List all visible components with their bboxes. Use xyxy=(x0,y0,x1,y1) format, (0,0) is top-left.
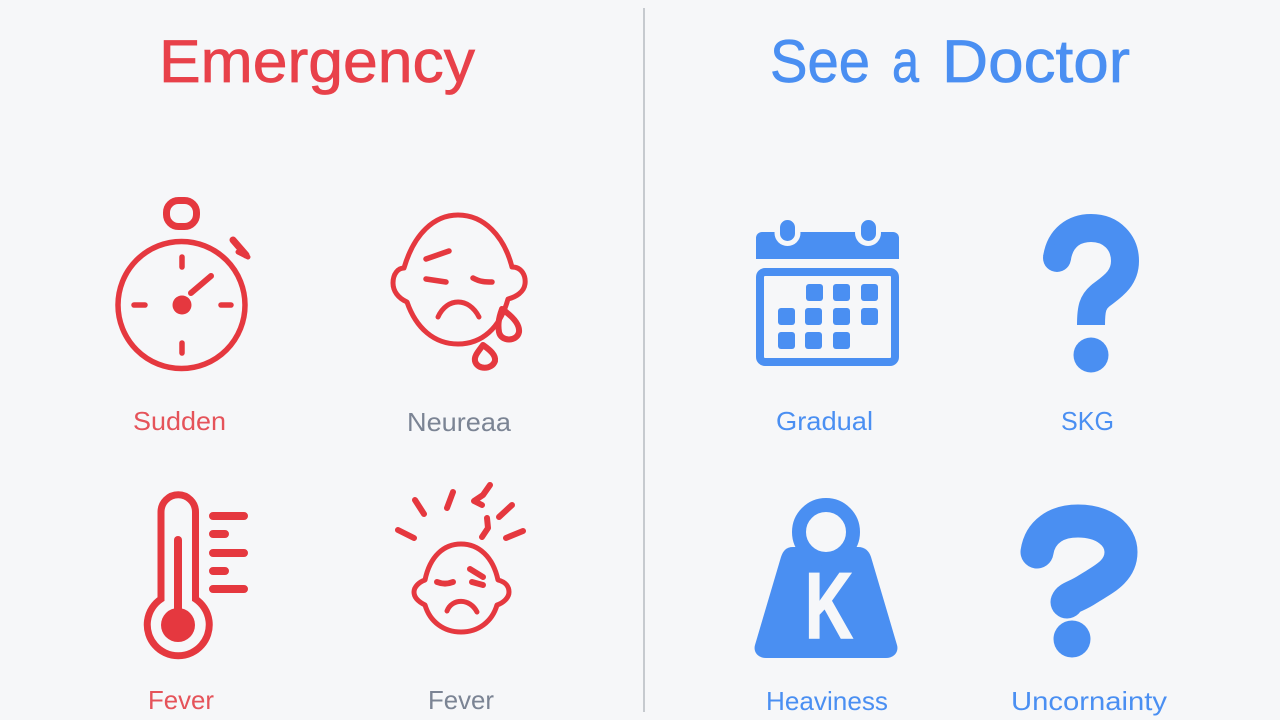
label: Sudden: Sudden xyxy=(133,406,226,436)
icon: kettlebell weight xyxy=(755,505,897,658)
title: See a Doctor: Doctor xyxy=(942,28,1130,95)
title: See a Doctor: See xyxy=(770,28,870,95)
title: See a Doctor: a xyxy=(892,28,920,95)
label: Gradual: Gradual xyxy=(776,406,873,436)
icon: thermometer xyxy=(147,495,244,656)
icon: kettlebell weight: K xyxy=(805,553,853,658)
icon: calendar xyxy=(756,220,899,362)
icon: stopwatch xyxy=(118,200,248,368)
label: Fever gray: Fever xyxy=(428,685,494,715)
icon: nauseous face xyxy=(393,215,525,368)
title: Emergency: Emergency xyxy=(159,28,475,95)
icon: question mark xyxy=(1043,228,1125,372)
label: Uncornainty: Uncornainty xyxy=(1011,686,1167,716)
label: SKG: SKG xyxy=(1061,406,1114,436)
label: Fever: Fever xyxy=(148,685,214,715)
label: Neureaa: Neureaa xyxy=(407,407,512,437)
icon: headache face xyxy=(398,485,523,632)
icon: question mark 2 xyxy=(1037,521,1121,658)
label: Heaviness: Heaviness xyxy=(766,686,888,716)
